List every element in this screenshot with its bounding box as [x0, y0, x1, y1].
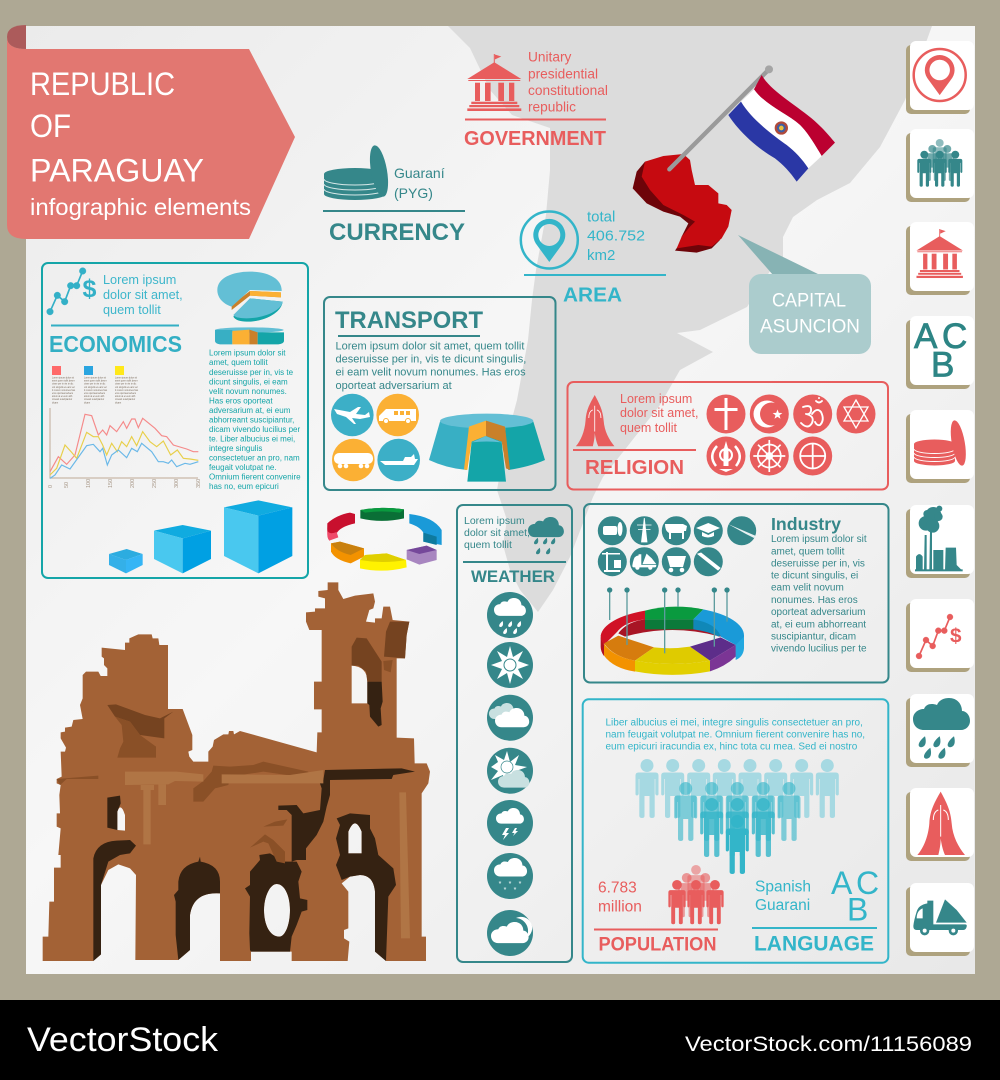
icon: dump truck: [630, 547, 659, 576]
government description: Unitary: [528, 50, 572, 65]
chart legend: arium at ei eum abh: [84, 395, 105, 398]
weather divider: [463, 561, 566, 563]
weather intro text: [464, 515, 530, 551]
panel: economics: [42, 263, 308, 578]
icon: cattle: [662, 516, 691, 545]
transport body text: ei eam velit novum nonumes. Has eros: [336, 367, 526, 379]
transport heading: TRANSPORT: [335, 307, 483, 334]
icon: christian cross: [706, 394, 746, 434]
icon: mine cart: [662, 547, 691, 576]
industry body text: amet, quem tollit: [771, 546, 845, 557]
map of Paraguay with flag: [633, 65, 835, 253]
economics body text: abhorreant suscipiantur,: [209, 415, 294, 424]
icon: cloudy: [487, 695, 533, 741]
industry body text: suscipiantur, dicam: [771, 631, 856, 642]
population body text: Liber albucius ei mei, integre singulis consectetuer an pro,: [606, 717, 863, 728]
icon: rain: [487, 592, 533, 638]
panel: religion: [568, 382, 888, 490]
panel: weather: [457, 505, 572, 962]
side icon card: language: C: [942, 317, 967, 356]
industry body text: vivendo lucilius per te: [771, 644, 867, 655]
ring chart with pins: [601, 587, 744, 675]
chart legend: eros oporteat advers: [52, 392, 74, 395]
side icon card: religion: [906, 788, 974, 861]
3D cubes: [109, 500, 292, 573]
population body text: [606, 717, 865, 752]
chart legend: unt singulis ei eam vel: [52, 386, 75, 389]
area value: total: [587, 209, 615, 226]
religion intro text: quem tollit: [620, 421, 677, 435]
chart legend: orreant suscipiantur: [115, 398, 135, 401]
line chart: 0: [48, 485, 54, 488]
title text line 3: PARAGUAY: [30, 153, 204, 189]
3D segmented bar: [215, 327, 284, 344]
religion divider: [573, 449, 696, 451]
icon: growth chart with dollar: $: [82, 275, 96, 303]
icon: power pylon: [630, 516, 659, 545]
icon: sun: [487, 642, 533, 688]
line chart: 300: [174, 479, 180, 488]
language names: Guarani: [755, 897, 810, 914]
icon: om: [793, 394, 832, 434]
chart legend: arium at ei eum abh: [52, 395, 73, 398]
economics intro text: dolor sit amet,: [103, 288, 183, 302]
religion intro text: dolor sit amet,: [620, 406, 699, 420]
icon: syringe: [694, 547, 723, 576]
icon: coins: [324, 144, 391, 200]
icon: snow: *: [514, 887, 517, 894]
icon: airplane: [331, 394, 374, 436]
language heading: LANGUAGE: [754, 933, 874, 956]
chart legend: dicam: [115, 402, 121, 404]
icon: snow: *: [499, 881, 502, 888]
chart legend: it novum nonumes has: [115, 389, 139, 392]
chart legend: uisse per in vis te dic: [84, 383, 106, 386]
subtitle: infographic elements: [30, 194, 251, 220]
icon: oil tanks: [598, 516, 627, 545]
exploded ring chart: [327, 508, 442, 571]
economics body text: deseruisse per in, vis te: [209, 368, 294, 377]
industry body text: at, ei eum abhorreant: [771, 619, 866, 630]
capital label: ASUNCION: [760, 317, 860, 338]
transport body text: oporteat adversarium at: [336, 380, 452, 392]
icon: rain cloud: [528, 517, 564, 554]
chart legend: amet quem tollit deser: [52, 380, 75, 383]
side icon card: economics: [906, 599, 974, 672]
flag of Paraguay: [728, 75, 835, 182]
transport body text: deseruisse per in, vis te dicunt singulis,: [336, 354, 526, 366]
line chart: 100: [86, 479, 92, 488]
transport body text: Lorem ipsum dolor sit amet, quem tollit: [336, 340, 524, 352]
language names: Spanish: [755, 879, 811, 896]
weather intro text: quem tollit: [464, 539, 512, 551]
population body text: nam feugait volutpat ne. Omnium fierent convenire has no,: [606, 729, 865, 740]
chart legend: Lorem ipsum dolor sit: [115, 376, 137, 380]
pie chart exploded: [217, 272, 283, 322]
economics body text: Lorem ipsum dolor sit: [209, 349, 286, 358]
church ruins illustration: [43, 582, 430, 961]
economics body text: te. Liber albucius ei mei,: [209, 434, 295, 444]
chart legend: amet quem tollit deser: [115, 380, 138, 383]
panel: industry: [584, 504, 888, 682]
economics divider: [51, 324, 179, 326]
economics intro text: Lorem ipsum: [103, 273, 176, 287]
chart legend: dicam: [84, 402, 90, 404]
side icon card: economics: $: [950, 625, 962, 648]
area value: km2: [587, 247, 615, 264]
icon: dharma wheel: [750, 436, 789, 476]
line chart: 50: [64, 482, 70, 488]
chart legend: eros oporteat advers: [115, 392, 137, 395]
economics body text: has no, eum epicuri: [209, 482, 279, 491]
icon: growth chart with dollar: [47, 268, 96, 315]
language divider: [752, 927, 877, 929]
side icon card: language: [906, 316, 974, 389]
flag pole: [669, 65, 773, 169]
chart legend: Lorem ipsum dolor sit: [84, 376, 106, 380]
area heading: AREA: [563, 285, 622, 307]
language letters: A: [831, 865, 853, 901]
watermark logo: VectorStock: [27, 1021, 219, 1059]
panel: transport: [324, 297, 556, 490]
area value: 406.752: [587, 228, 645, 245]
economics heading: ECONOMICS: [49, 331, 182, 357]
economics body text: velit novum nonumes.: [209, 387, 287, 396]
Paraguay map extrusion: [633, 162, 720, 253]
transport body text: [336, 340, 526, 392]
line chart: 150: [108, 479, 114, 488]
side icon card: mining truck: [906, 883, 974, 956]
icon: snow: *: [519, 881, 522, 888]
map of South America silhouette: [448, 26, 932, 612]
icon: area location pin: [521, 212, 578, 268]
people pictogram: [636, 759, 839, 874]
chart legend: orreant suscipiantur: [84, 398, 104, 401]
capital label: CAPITAL: [772, 291, 846, 312]
panel: population and language: [583, 699, 888, 963]
icon: crescent and star: [750, 394, 789, 434]
chart legend: [52, 366, 139, 404]
chart legend: Lorem ipsum dolor sit: [52, 376, 74, 380]
icon: government building: [467, 54, 521, 111]
icon: khanda: [706, 436, 746, 476]
line chart: 350: [196, 479, 202, 488]
icon: bus: [376, 394, 419, 436]
area value: [587, 209, 645, 264]
chart legend: unt singulis ei eam vel: [84, 386, 107, 389]
industry body text: Lorem ipsum dolor sit: [771, 534, 867, 545]
industry body text: oporteat adversarium: [771, 607, 866, 618]
religion intro text: Lorem ipsum: [620, 392, 692, 406]
side icon card: language: A: [914, 317, 938, 356]
title text: REPUBLIC: [30, 66, 175, 102]
currency divider: [323, 210, 465, 212]
economics body text: [209, 349, 301, 491]
population body text: eum epicuri iracundia ex, hinc tota cu mea. Sed ei nostro: [606, 741, 858, 752]
language letters: B: [847, 892, 868, 928]
3D pie chart: [429, 414, 545, 482]
economics body text: amet, quem tollit: [209, 358, 268, 367]
chart legend: uisse per in vis te dic: [115, 383, 137, 386]
icon: rail tanker: [332, 439, 375, 481]
language letters: [831, 865, 879, 928]
chart legend: uisse per in vis te dic: [52, 383, 74, 386]
title ribbon: [7, 25, 295, 239]
currency text: [394, 165, 445, 201]
side icon card: language: B: [931, 346, 954, 385]
icon: sun cross: [793, 436, 832, 476]
watermark footer: [0, 1000, 1000, 1080]
side icon card: industry: [906, 505, 974, 578]
line chart: 250: [152, 479, 158, 488]
government description: [528, 50, 608, 115]
industry body text: te dicunt singulis, ei: [771, 571, 858, 582]
transport divider: [338, 335, 480, 337]
economics body text: feugait volutpat ne.: [209, 463, 277, 472]
currency heading: CURRENCY: [329, 219, 465, 246]
industry body text: eam velit novum: [771, 583, 844, 594]
icon: star of David: [836, 394, 876, 434]
economics body text: Has eros oporteat: [209, 396, 273, 405]
icon: port crane: [598, 547, 627, 576]
icon: red people group: [668, 865, 724, 924]
icon: night: [487, 910, 533, 956]
side icon card: location: [906, 41, 974, 114]
chart legend: dicam: [52, 402, 58, 404]
icon: rifle: [727, 516, 756, 545]
economics body text: dicunt singulis, ei eam: [209, 377, 288, 386]
panel: area: [521, 209, 666, 307]
panel: government: [464, 50, 608, 150]
economics intro text: [103, 273, 183, 317]
ring far inner walls: [618, 619, 727, 637]
population heading: POPULATION: [598, 935, 716, 956]
area divider: [524, 274, 666, 276]
icon: cargo ship: [377, 439, 420, 481]
line chart: 200: [130, 479, 136, 488]
icon: partly sunny: [487, 748, 533, 794]
icon: thunderstorm: [487, 800, 533, 846]
economics body text: dicam vivendo lucilius per: [209, 425, 300, 434]
government divider: [465, 118, 606, 120]
side icon card: government: [906, 222, 974, 295]
pins: [607, 587, 730, 653]
chart legend: eros oporteat advers: [84, 392, 106, 395]
icon: praying hands: [576, 395, 614, 446]
currency text: (PYG): [394, 185, 433, 201]
language letters: C: [856, 865, 879, 901]
industry body text: nonumes. Has eros: [771, 595, 858, 606]
title text line 2: OF: [30, 108, 71, 144]
economics body text: Omnium fierent convenire: [209, 473, 301, 482]
icon: snow: *: [509, 881, 512, 888]
ruins dark shadows: [93, 682, 415, 961]
capital label: [760, 291, 860, 338]
economics body text: consectetuer an pro, nam: [209, 454, 300, 463]
government description: presidential: [528, 66, 598, 81]
population value: 6.783: [598, 880, 637, 897]
government description: constitutional: [528, 83, 608, 98]
icon: graduation cap: [694, 516, 723, 545]
population value: [598, 880, 642, 916]
line chart: [48, 408, 202, 488]
economics body text: integre singulis: [209, 444, 262, 453]
language names: [755, 879, 811, 914]
chart legend: amet quem tollit deser: [84, 380, 107, 383]
economics intro text: quem tollit: [103, 303, 161, 317]
Paraguay map: [642, 154, 732, 248]
industry body text: [771, 534, 867, 655]
ruins light bands: [125, 770, 410, 938]
panel: currency: [323, 144, 465, 246]
ruins mid-brown details: [107, 622, 409, 738]
weather intro text: dolor sit amet,: [464, 527, 530, 539]
government heading: GOVERNMENT: [464, 128, 606, 150]
currency text: Guaraní: [394, 165, 445, 181]
industry body text: deseruisse per in, vis: [771, 558, 865, 569]
icon: snow: *: [504, 887, 507, 894]
government description: republic: [528, 100, 576, 115]
weather heading: WEATHER: [471, 567, 555, 586]
chart legend: it novum nonumes has: [84, 389, 108, 392]
weather intro text: Lorem ipsum: [464, 515, 525, 527]
callout: capital: [738, 235, 871, 354]
chart legend: it novum nonumes has: [52, 389, 76, 392]
side icon card: population: [906, 129, 974, 202]
religion intro text: [620, 392, 699, 435]
economics body text: adversarium at, ei eum: [209, 406, 291, 415]
side icon card: currency: [906, 410, 974, 483]
chart legend: arium at ei eum abh: [115, 395, 136, 398]
population value: million: [598, 899, 642, 916]
chart legend: orreant suscipiantur: [52, 398, 72, 401]
icon: snow: [487, 853, 533, 899]
chart legend: unt singulis ei eam vel: [115, 386, 138, 389]
religion heading: RELIGION: [585, 457, 684, 479]
side icon card: weather: [906, 694, 974, 767]
industry heading: Industry: [771, 514, 841, 534]
watermark url: VectorStock.com/11156089: [685, 1032, 972, 1056]
population divider: [594, 928, 718, 930]
ruins main wall: [43, 582, 430, 961]
